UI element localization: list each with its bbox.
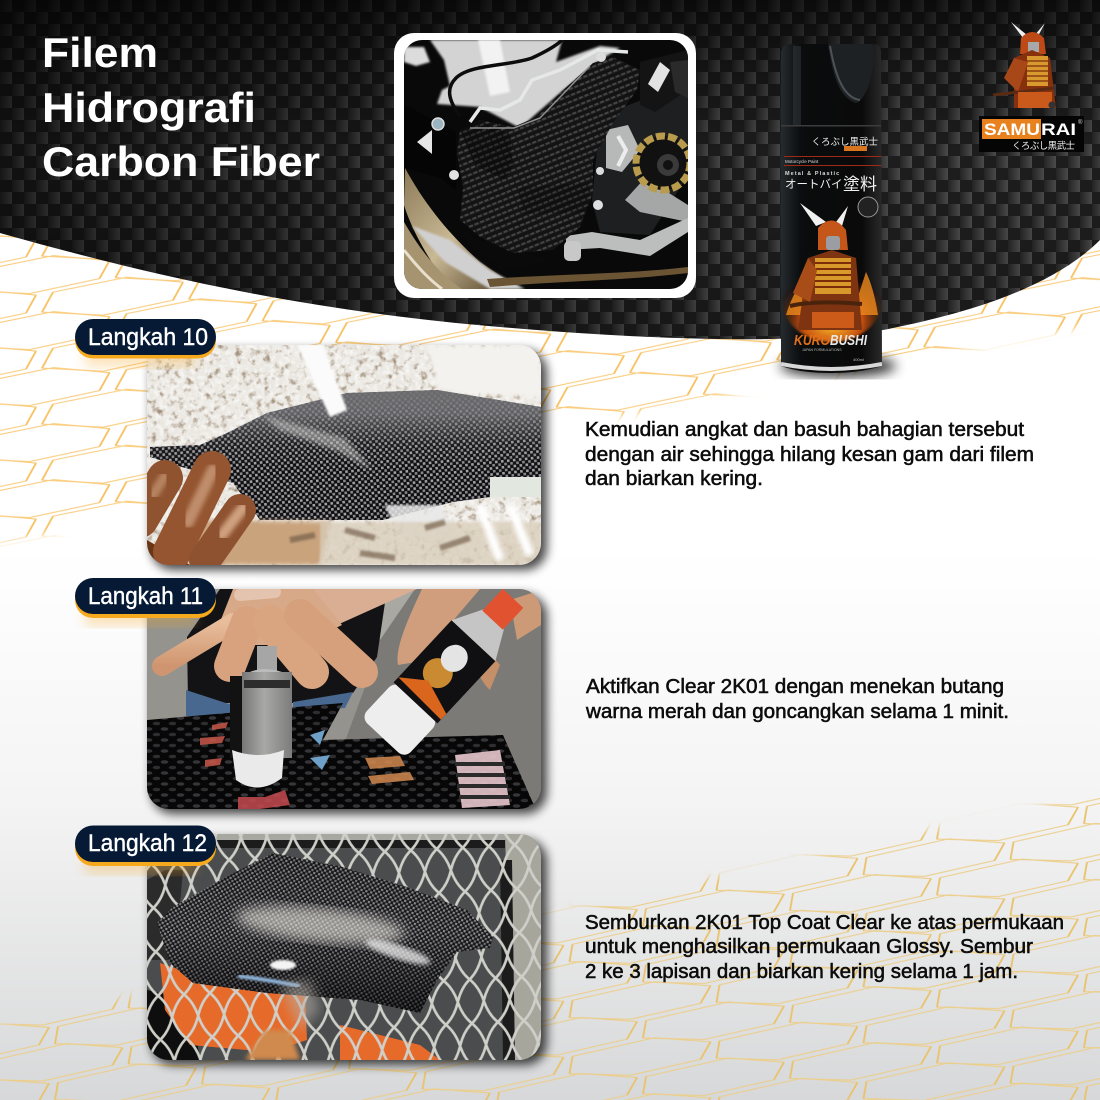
spray can product bbox=[780, 44, 896, 377]
badge: Langkah 11: Langkah 11 bbox=[88, 583, 203, 610]
badge: Langkah 11 bbox=[75, 578, 216, 626]
text: step 12 description: 2 ke 3 lapisan dan biarkan kering selama 1 jam. bbox=[585, 961, 1018, 983]
text: step 10 description: dan biarkan kering. bbox=[585, 468, 763, 490]
badge: Langkah 10 bbox=[75, 319, 216, 367]
text: step 11 description bbox=[585, 676, 1009, 723]
photo: carbon engine cover in white frame bbox=[394, 33, 696, 298]
text: step 11 description: Aktifkan Clear 2K01 dengan menekan butang bbox=[586, 676, 1004, 698]
text: step 12 description bbox=[585, 912, 1064, 983]
spray can product: Motorcycle Paint bbox=[785, 159, 819, 164]
badge: Langkah 10: Langkah 10 bbox=[88, 324, 208, 351]
background hexagon lines: top bbox=[0, 235, 1100, 547]
badge: Langkah 12: Langkah 12 bbox=[88, 830, 207, 857]
logo: samurai brand: SAMU bbox=[984, 120, 1040, 139]
logo: samurai brand: ® bbox=[1078, 119, 1083, 126]
spray can product: 塗料 bbox=[843, 175, 877, 194]
spray can product: オートバイ bbox=[785, 178, 842, 191]
logo: samurai brand: くろぶし黒武士 bbox=[1012, 140, 1075, 152]
text: step 12 description: Semburkan 2K01 Top Coat Clear ke atas permukaan bbox=[585, 912, 1064, 934]
photo: step 10 washing the part bbox=[140, 345, 547, 570]
step 11 upright can bbox=[230, 646, 292, 788]
text: step 10 description: dengan air sehingga hilang kesan gam dari filem bbox=[585, 444, 1034, 466]
spray can product: くろぶし黒武士 bbox=[811, 136, 878, 148]
title: Filem bbox=[42, 29, 158, 76]
text: step 12 description: untuk menghasilkan permukaan Glossy. Sembur bbox=[585, 936, 1033, 958]
title: Carbon Fiber bbox=[42, 138, 320, 185]
can floor shadow bbox=[780, 355, 896, 377]
photo: step 11 activating the clear coat bbox=[147, 578, 547, 814]
logo: samurai brand: RAI bbox=[1041, 120, 1076, 139]
spray can product: 400ml bbox=[853, 357, 864, 362]
badge: Langkah 12 bbox=[75, 826, 216, 874]
spray can product: KURO bbox=[794, 332, 830, 349]
spray can product: Metal & Plastic bbox=[785, 171, 840, 177]
title: Hidrografi bbox=[42, 84, 256, 131]
text: step 10 description: Kemudian angkat dan basuh bahagian tersebut bbox=[585, 419, 1024, 441]
samurai on can bbox=[790, 203, 862, 330]
step 11 tilted can bbox=[364, 589, 524, 755]
logo: samurai brand bbox=[979, 22, 1084, 152]
title bbox=[42, 29, 320, 185]
spray can product: JAPAN FORMULATIONS bbox=[802, 348, 842, 352]
photo: step 12 spraying the top coat bbox=[147, 834, 547, 1065]
spray can product: BUSHI bbox=[830, 332, 868, 349]
text: step 10 description bbox=[585, 419, 1034, 490]
background hexagon lines: bottom bbox=[0, 798, 1100, 1100]
text: step 11 description: warna merah dan goncangkan selama 1 minit. bbox=[585, 701, 1009, 723]
logo warrior figure bbox=[993, 22, 1056, 108]
carbon fiber header band bbox=[0, 0, 1100, 339]
